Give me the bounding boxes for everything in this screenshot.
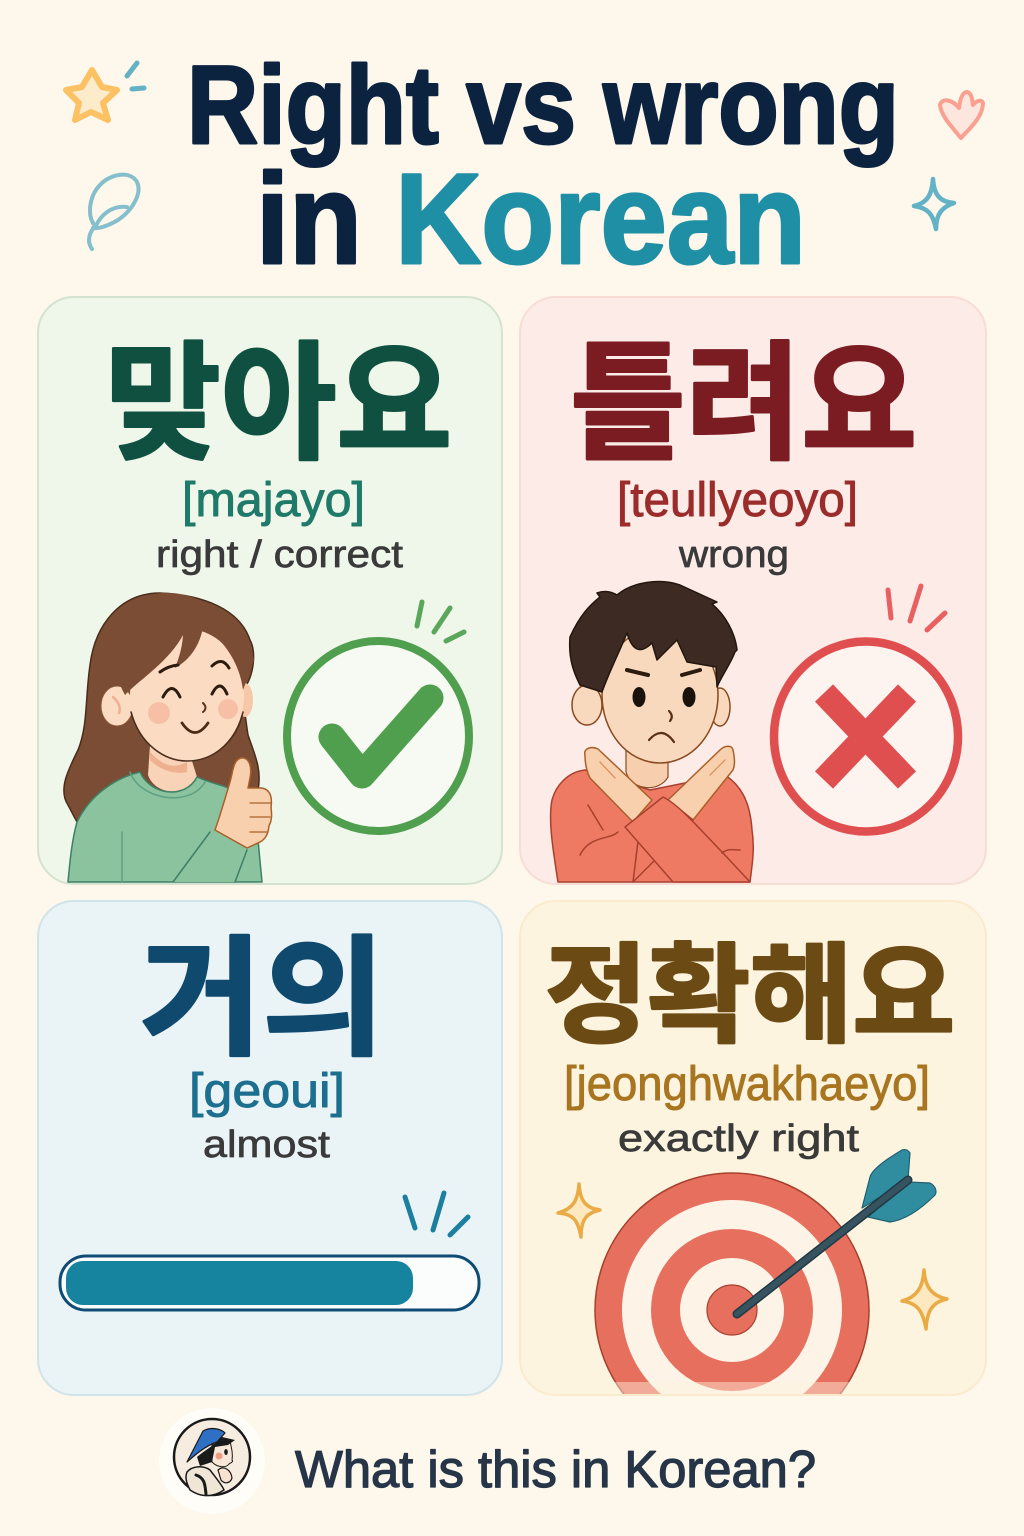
icon: x in circle [774,586,958,832]
illustration: girl thumbs up [64,593,272,882]
meaning: exactly right [618,1118,860,1160]
panel: wrong [520,297,986,884]
panel: exactly right [520,901,986,1447]
meaning: right / correct [156,534,403,576]
footer text: What is this in Korean? [295,1441,816,1499]
korean word: jeonghwakhaeyo: 정확해요 [545,935,955,1056]
illustration: target with arrow [594,1149,937,1394]
icon: sparkle [914,179,954,229]
panel: right [38,297,502,884]
illustration: boy crossing arms [551,582,753,882]
progress bar [60,1256,479,1310]
icon: check in circle [287,602,469,831]
romanization: [geoui] [189,1065,345,1118]
romanization: [majayo] [182,474,365,527]
icon: gold sparkle right [902,1270,947,1329]
title: in Korean [256,148,806,291]
panel: almost [38,901,502,1395]
korean word: geoui: 거의 [140,926,385,1072]
romanization: [jeonghwakhaeyo] [564,1058,930,1111]
footer avatar [159,1408,265,1514]
meaning: almost [203,1124,331,1166]
title [187,44,899,291]
korean word: teullyeoyo: 틀려요 [570,333,917,476]
icon: gold sparkle left [558,1184,600,1237]
icon: heart [940,92,983,138]
meaning: wrong [678,534,789,576]
icon: leaf [89,175,139,249]
icon: emphasis ticks [405,1193,468,1235]
title: Right vs wrong [187,44,899,167]
korean word: majayo: 맞아요 [105,333,452,476]
icon: star with sparks [66,63,144,120]
romanization: [teullyeoyo] [617,474,858,527]
